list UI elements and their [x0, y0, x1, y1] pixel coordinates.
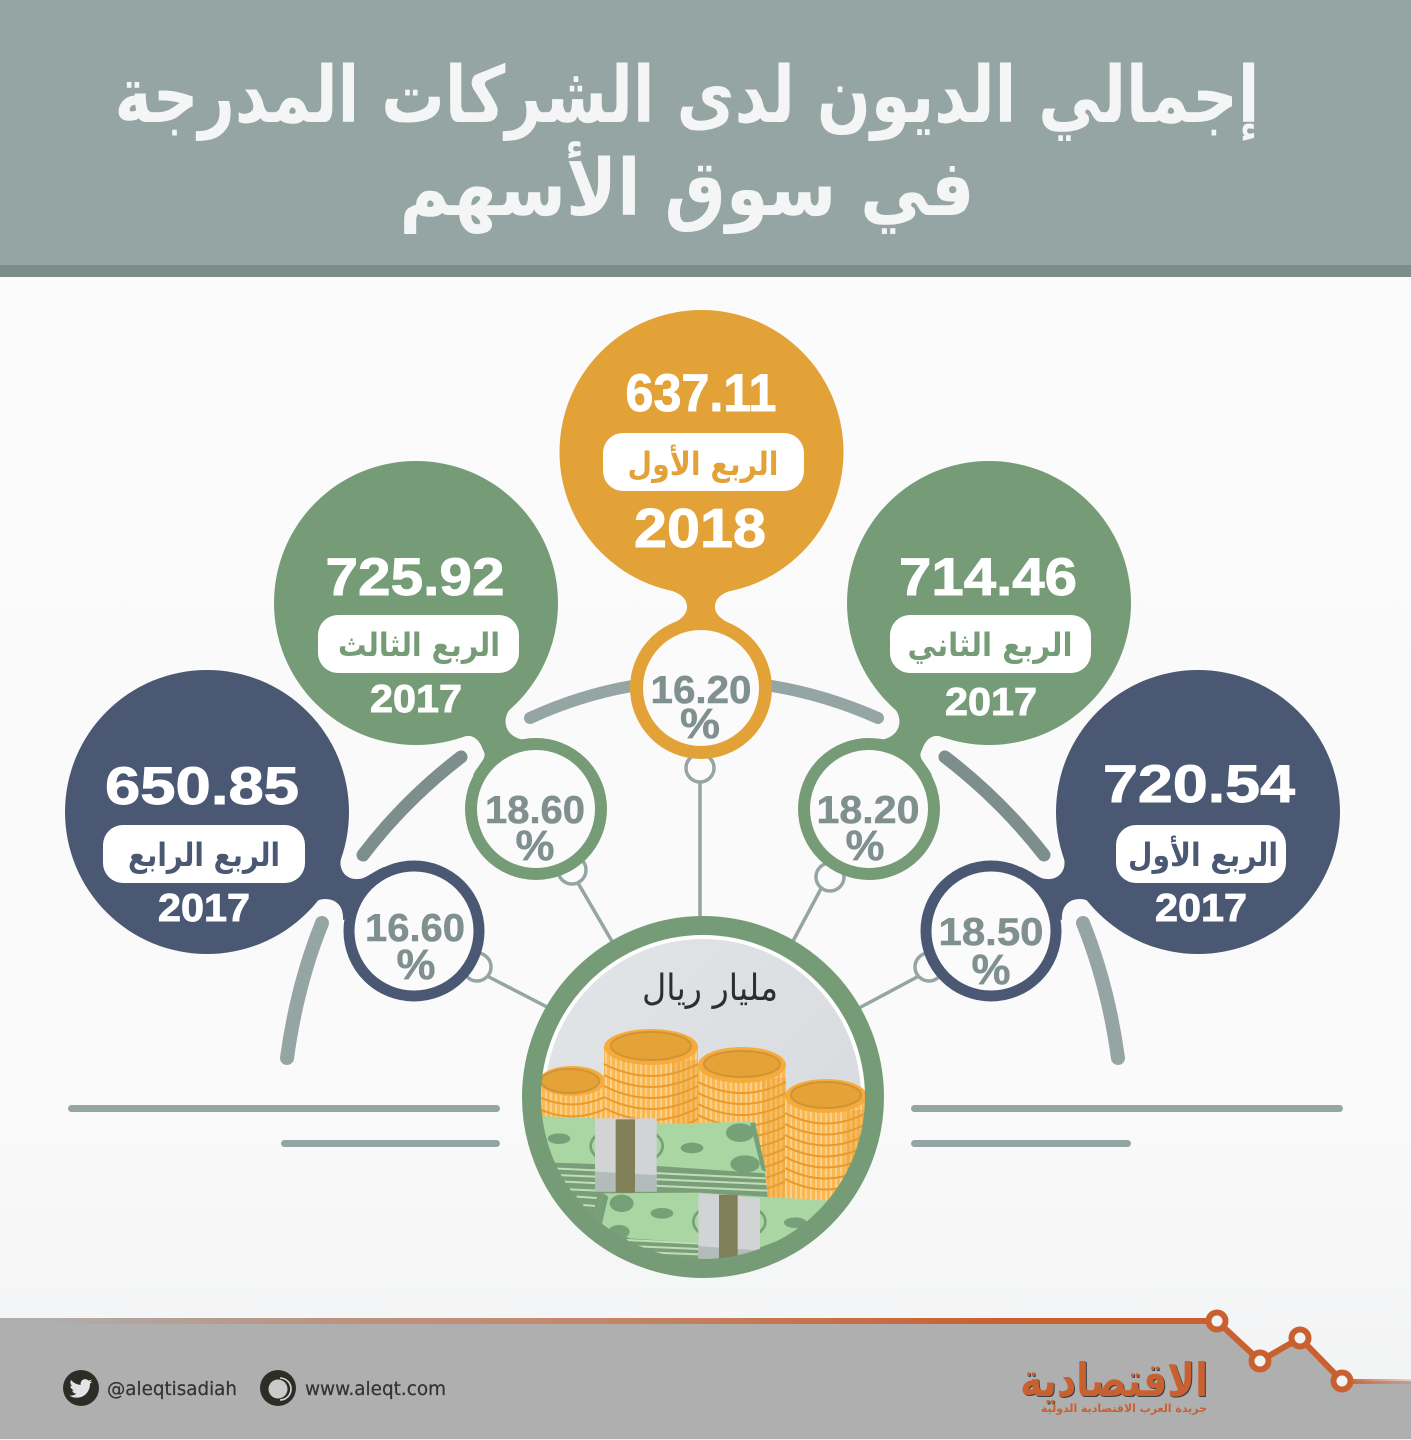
central picture: coins and banknotes: [532, 926, 874, 1277]
year: 2017: [1155, 887, 1247, 930]
arc: middle left: [363, 757, 461, 855]
year: 2017: [158, 887, 250, 930]
percent: 16.20: [650, 669, 752, 712]
percent: 16.60: [365, 907, 465, 950]
quarter pill: [103, 825, 305, 883]
quarter pill: [603, 433, 804, 491]
value: 714.46: [899, 548, 1077, 607]
bubble: Q2 2017: [804, 461, 1131, 874]
value: 720.54: [1103, 755, 1296, 814]
bubble: Q3 2017: %: [516, 822, 554, 870]
arc: middle right: [945, 757, 1044, 855]
twitter handle: @aleqtisadiah: [107, 1378, 237, 1400]
arc: top right: [772, 686, 878, 718]
arc: lower right: [1083, 923, 1118, 1058]
bubble: Q1 2017: [926, 670, 1340, 996]
percent: 18.50: [938, 911, 1044, 954]
percent: 18.20: [816, 789, 920, 832]
newspaper logo: الاقتصادية: [1020, 1353, 1208, 1407]
year: 2017: [370, 678, 462, 721]
quarter pill: [318, 615, 519, 673]
value: 725.92: [326, 548, 504, 607]
bubble: Q4 2017: %: [396, 941, 436, 989]
quarter pill: [890, 615, 1091, 673]
title line 2: في سوق الأسهم: [400, 142, 974, 234]
year: 2017: [945, 681, 1037, 724]
connectors to the central picture: [463, 754, 943, 1008]
value: 637.11: [626, 364, 776, 423]
website address: www.aleqt.com: [305, 1378, 446, 1400]
bubble: Q2 2017: %: [846, 822, 884, 870]
quarter pill: [1116, 825, 1286, 883]
arc: lower left: [287, 923, 322, 1058]
bubble: Q1 2018: %: [680, 700, 720, 748]
bubble: Q3 2017: [274, 461, 601, 874]
side rule: right: [911, 1105, 1343, 1147]
icon: coin stacks: [538, 1029, 867, 1205]
line chart motif: [1208, 1312, 1350, 1390]
bubble: Q1 2017: %: [972, 946, 1010, 994]
side rule: left: [68, 1105, 500, 1147]
bubble: Q3 2017: الربع الثالث: [338, 626, 500, 664]
icon: twitter: [63, 1370, 99, 1406]
green frame: [532, 926, 874, 1268]
year: 2018: [634, 497, 766, 559]
bubble: Q1 2018: الربع الأول: [628, 444, 778, 483]
bubble: Q1 2018: [560, 310, 844, 752]
bubble: Q1 2017: الربع الأول: [1128, 835, 1278, 874]
bubble: Q4 2017: [65, 670, 479, 996]
bubble: Q2 2017: الربع الثاني: [908, 626, 1072, 664]
unit label: مليار ريال: [642, 968, 778, 1009]
footer band: [0, 1312, 1411, 1439]
header band: [0, 0, 1411, 277]
bubble: Q4 2017: الربع الرابع: [128, 836, 280, 874]
percent: 18.60: [485, 789, 585, 832]
logo tagline: جريدة العرب الاقتصادية الدولية: [1041, 1402, 1207, 1415]
icon: website: [260, 1370, 296, 1406]
arc: top left: [530, 686, 632, 718]
value: 650.85: [105, 757, 299, 816]
icon: banknotes: [542, 1116, 828, 1259]
